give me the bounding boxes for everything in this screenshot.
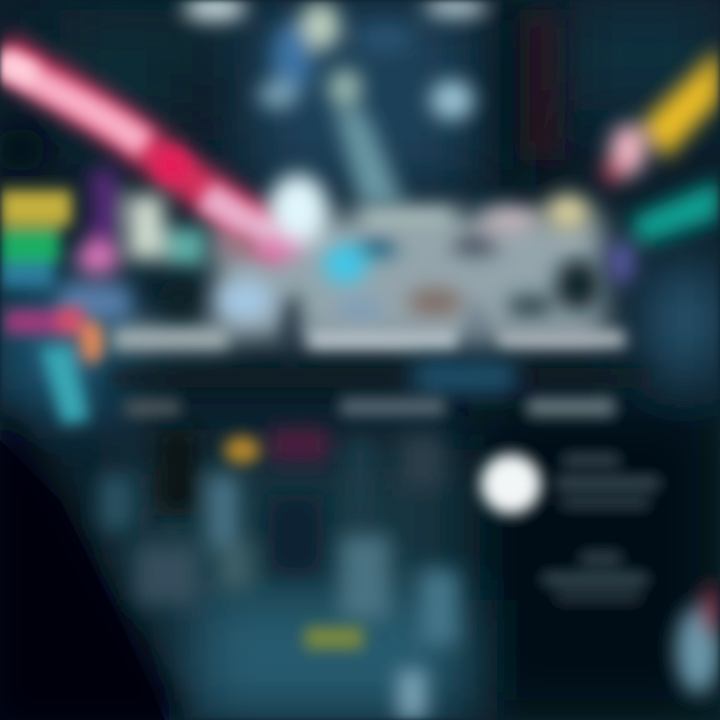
yellow and pink band, upper right: [520, 10, 720, 185]
chart: orange and maroon markers: [224, 428, 330, 464]
top light spots: [183, 0, 488, 205]
lower right accent: [676, 584, 720, 694]
dark gap under pink band: [0, 128, 46, 172]
base of lower-left silhouette: [0, 440, 165, 720]
three column headings: [125, 398, 615, 416]
chart: centre column: [340, 435, 458, 720]
chart: left column: [100, 430, 323, 605]
dark band below headline: [110, 360, 650, 394]
headline band: [115, 328, 625, 350]
dark foreground silhouette, lower left: [0, 400, 185, 720]
colour stripes, left: [0, 170, 206, 320]
hazy central panel: [110, 215, 605, 349]
text block, right column: [542, 454, 660, 602]
multicolour block, left: [5, 307, 104, 425]
pink band, upper left: [0, 52, 285, 245]
teal band, right: [609, 180, 720, 284]
icon: white circle: [481, 454, 541, 514]
central light details: [158, 174, 600, 360]
yellow marker: [305, 627, 363, 649]
